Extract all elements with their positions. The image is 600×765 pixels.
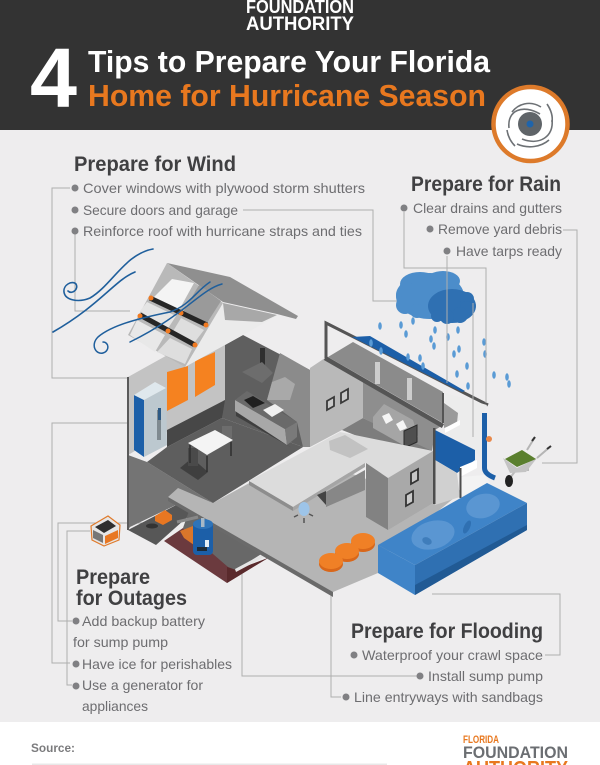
panel: prepare for wind (72, 153, 365, 239)
panel: prepare for rain: Clear drains and gutters (413, 200, 562, 216)
icon: wind gusts (53, 249, 153, 332)
range hood (242, 348, 295, 400)
lower wall and ledge (128, 455, 213, 545)
lower porch (433, 428, 490, 505)
logo footer: FOUNDATION (463, 743, 568, 762)
rain drops (369, 317, 511, 390)
rain connector lines (404, 212, 486, 437)
panel: prepare for flooding (342, 620, 543, 705)
light slab (249, 432, 433, 511)
source label: Source: (31, 741, 75, 755)
crawl space pit (164, 508, 268, 583)
panel: prepare for wind: Cover windows with plywood storm shutters (83, 180, 365, 196)
backup battery (146, 510, 198, 528)
icon: hurricane badge (494, 87, 568, 161)
panel: prepare for flooding: Line entryways with sandbags (354, 689, 543, 705)
illustration: roof with hurricane straps (128, 263, 298, 367)
logo footer (463, 734, 569, 765)
panel: prepare for flooding: Prepare for Flooding (351, 620, 543, 643)
panel: prepare for wind: Prepare for Wind (74, 153, 236, 176)
living room back wall (363, 381, 443, 452)
wind gusts over roof (94, 282, 222, 353)
panel: prepare for rain (400, 173, 562, 259)
right room block (366, 451, 433, 530)
header band (0, 0, 600, 130)
flood water block (378, 483, 527, 595)
exterior wall (310, 358, 363, 447)
icon: generator (91, 516, 120, 546)
logo top: AUTHORITY (246, 14, 354, 35)
connector lines (52, 188, 577, 697)
panel: prepare for wind: Reinforce roof with hurricane straps and ties (83, 223, 362, 239)
panel: prepare for outages: Prepare (76, 566, 150, 589)
icon: wheelbarrow (503, 437, 551, 487)
title: Tips to Prepare Your Florida (88, 44, 491, 79)
icon: rain cloud (369, 271, 511, 390)
panel: prepare for flooding: Waterproof your crawl space (362, 647, 543, 663)
dining table (180, 426, 233, 480)
panel: prepare for wind: Secure doors and garage (83, 202, 238, 218)
title number: 4 (30, 31, 77, 125)
blue curtain (435, 430, 475, 473)
panel: prepare for outages: for sump pump (73, 634, 168, 650)
ground slab (168, 455, 470, 597)
upper porch (444, 393, 487, 460)
panel: prepare for outages: Add backup battery (82, 613, 205, 629)
kitchen side wall (128, 323, 225, 455)
panel: prepare for outages (72, 566, 232, 714)
panel: prepare for outages: appliances (82, 698, 148, 714)
panel: prepare for rain: Have tarps ready (456, 243, 562, 259)
downspout gutter (484, 413, 495, 478)
logo top (246, 0, 354, 35)
title (88, 44, 491, 113)
panel: prepare for outages: for Outages (76, 587, 187, 610)
panel: prepare for outages: Have ice for perishables (82, 656, 232, 672)
sandbags (319, 533, 375, 572)
kitchen cabinets (235, 391, 297, 448)
sump pump (193, 518, 213, 555)
kitchen floor (147, 418, 303, 503)
footer (0, 722, 600, 765)
storm shutters (167, 352, 215, 411)
title: Home for Hurricane Season (88, 78, 486, 113)
wall frames (327, 389, 348, 410)
refrigerator (134, 382, 167, 457)
living room floor (342, 418, 434, 452)
panel: prepare for rain: Prepare for Rain (411, 173, 561, 196)
icon: ceiling fan (294, 502, 313, 523)
ceiling and roof frame (325, 323, 488, 426)
panel: prepare for outages: Use a generator for (82, 677, 203, 693)
illustration: isometric house (127, 323, 495, 597)
sofa (373, 404, 418, 448)
kitchen back wall (222, 335, 310, 447)
panel: prepare for flooding: Install sump pump (428, 668, 543, 684)
logo footer: FLORIDA (463, 734, 499, 746)
panel: prepare for rain: Remove yard debris (438, 221, 562, 237)
